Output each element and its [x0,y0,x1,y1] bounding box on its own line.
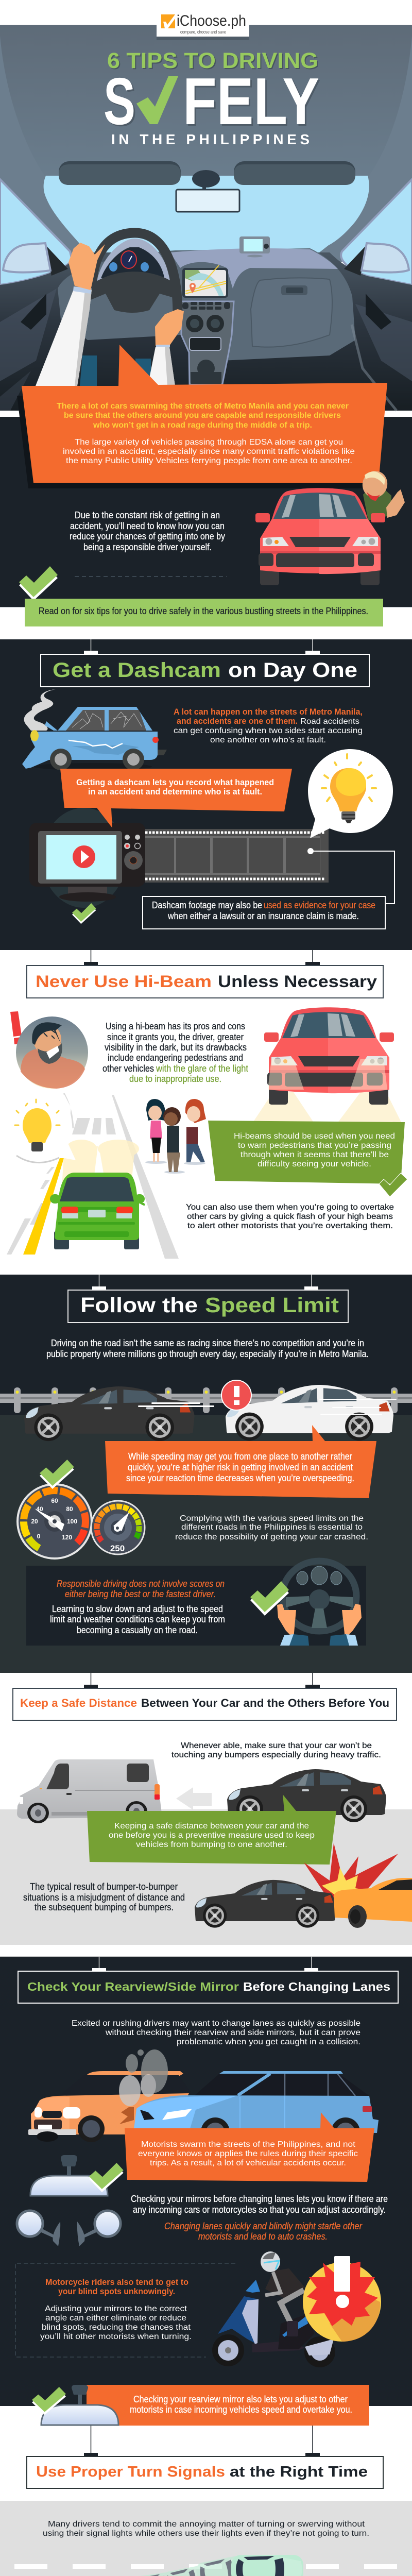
text: accidents: one another on who’s at fault. [210,736,326,744]
driver right arm [148,309,184,386]
heading: speed limit [68,1275,348,1323]
interior base [0,252,412,411]
side mirror right [344,243,409,276]
text: blind spots: your blind spots unknowingly. [58,2286,175,2296]
text: signals: using their signal lights while others use their lights even if they’re not going to turn. [43,2529,369,2538]
check icon: mirror [89,2163,124,2192]
text: hi-beam pros and cons: visibility in the dark, but its drawbacks [105,1042,247,1053]
illustration: side mirrors [17,2211,121,2246]
illustration: smoke [24,689,56,731]
illustration: blue car collision [134,2071,379,2146]
chart: large speedometer: 0 [37,1533,41,1540]
section: speed limit background [0,1275,412,1673]
text: checking mirrors: Changing lanes quickly and blindly might startle other [164,2221,363,2231]
illustration: swerving car trail [48,2554,303,2576]
heading: hi-beam: Unless Necessary [218,972,377,991]
text: signals: Many drivers tend to commit the annoying matter of turning or swerving without [48,2520,365,2529]
road dashes [14,2564,397,2576]
side window right [341,179,412,285]
logo: iChoose.ph header: compare, choose and save [180,29,226,35]
check icon: green [379,1173,407,1197]
text: overtake [186,1203,394,1230]
callout: safe distance [87,1794,336,1865]
text: responsible driver [70,510,225,552]
heading: hi-beam [27,950,383,998]
illustration: camera dome [42,808,126,908]
callout: hi-beam green [208,1121,405,1184]
text: accidents: A lot can happen on the streets of Metro Manila, [174,707,363,717]
callout: hi-beam green: to warn pedestrians that you’re passing [238,1141,391,1150]
box: evidence: when either a lawsuit or an insurance claim is made. [167,911,359,921]
text: bumper to bumper [23,1882,185,1912]
text: bumper to bumper: the subsequent bumping of bumpers. [35,1902,174,1912]
heading: turn signals: at the Right Time [230,2464,368,2480]
heading: safe distance: Keep a Safe Distance [20,1697,137,1709]
illustration: crash orange car [334,1878,412,1928]
text: blind spots [40,2277,192,2341]
logo: iChoose.ph header: iChoose.ph [177,12,246,29]
text: speed intro [46,1338,369,1359]
check icon: dashcam [72,903,96,924]
text: hi-beam pros and cons [102,1021,248,1084]
panel: responsible driving [26,1566,366,1646]
text: hi-beam pros and cons: include endangering pedestrians and [108,1053,243,1063]
sun visor right [234,161,355,185]
text: bumper to bumper: The typical result of bumper-to-bumper [30,1882,178,1892]
illustration: green car rear [50,1173,145,1249]
gps unit [239,236,270,258]
text: signals [43,2520,369,2538]
box: evidence [143,896,385,929]
illustration: smoke [119,2049,168,2106]
callout: speeding [105,1425,376,1498]
road [7,1093,179,1259]
title: S [104,64,135,139]
section: dashcam background [0,639,412,950]
title [104,48,321,147]
callout: speeding: since your reaction time decreases when you’re overspeeding. [126,1473,354,1483]
heading: mirrors [18,1956,398,2003]
center console [181,301,234,384]
illustration: man thumbs up [359,468,405,520]
text: speed limits [175,1514,368,1541]
box: evidence: Dashcam footage may also be [152,900,262,910]
illustration: rearview mirror 2 [41,2385,118,2425]
icon: warning [221,1380,251,1410]
icon: motorcycle warning [303,2256,381,2342]
panel: responsible driving: Learning to slow down and adjust to the speed [52,1604,223,1614]
callout: intro orange [22,345,387,483]
box: evidence: used as evidence for your case [264,900,375,910]
chart: large speedometer: 60 [51,1497,58,1504]
illustration: crash black car [195,1880,336,1928]
text: hi-beam pros and cons: since it grants you, the driver, greater [107,1032,244,1042]
callout: hi-beam green: difficulty seeing your vehicle. [258,1160,371,1168]
text: speed limits: reduce the possibility of getting your car crashed. [175,1533,368,1541]
chart: large speedometer: 100 [67,1518,77,1525]
callout: motorists: everyone knows or applies the rules during their specific [138,2149,358,2158]
text: hi-beam pros and cons: due to inappropriate use. [129,1074,221,1084]
callout: motorists: Motorists swarm the streets of the Philippines, and not [141,2140,356,2149]
text: changing lanes [72,2019,360,2046]
dash top [170,248,338,289]
text: bumpers [171,1741,381,1759]
heading: speed limit: Follow the [80,1293,198,1317]
sun visor left lower [59,164,181,185]
callout: intro orange: involved in an accident, especially since many commit traffic violations like [63,447,355,456]
illustration: guard rail [0,1387,412,1415]
illustration: orange car collision [28,2071,191,2142]
title: FELY [183,64,319,139]
callout: speeding: quickly, you’re at higher risk in getting involved in an accident [128,1462,353,1472]
title: S [105,66,137,140]
text: responsible driver: being a responsible driver yourself. [83,542,212,552]
title: 6 TIPS TO DRIVING [108,49,319,74]
text: hi-beam pros and cons: other vehicles [102,1063,154,1074]
illustration: pedestrians [145,1099,206,1174]
text: speed limits: Complying with the various speed limits on the [180,1514,364,1523]
heading: hi-beam: Never Use Hi-Beam [36,972,212,991]
text: accidents: and accidents are one of them. [177,716,298,726]
door rays [0,289,412,411]
callout: intro orange: the many Public Utility Vehicles ferrying people from one area to another. [66,456,352,465]
check icon: intro [19,566,58,601]
illustration: red car [255,488,385,585]
callout: rearview bottom: Checking your rearview mirror also lets you adjust to other [133,2394,348,2404]
illustration: black car behind van [227,1769,386,1822]
text: checking mirrors: motorists and lead to auto crashes. [198,2231,328,2242]
callout: intro shadow [17,396,381,488]
text: responsible driver: Due to the constant risk of getting in an [75,510,220,520]
illustration: damaged blue car [22,707,167,770]
callout: motorists [125,2112,374,2182]
text: blind spots: you’ll hit other motorists when turning. [40,2332,192,2341]
text: speed limits: different roads in the Philippines is essential to [181,1523,363,1532]
dash [58,248,355,361]
rearview mirror [176,170,239,212]
text: overtake: other cars by giving a quick flash of your high beams [187,1212,393,1221]
illustration: steering wheel hands [277,1561,362,1646]
callout: motorists: trips. As a result, a lot of vehicular accidents occur. [150,2159,346,2167]
text: speed intro: public property where millions go through every day, especially if you’re in Metro Manila. [46,1349,369,1359]
text: blind spots: Adjusting your mirrors to the correct [45,2304,187,2313]
icon: bulb left [15,1095,76,1163]
text: overtake: You can also use them when you’re going to overtake [186,1203,394,1212]
illustration: white speeding car [226,1385,397,1440]
heading: speed limit: Speed Limit [205,1293,339,1317]
heading: dashcam [41,639,369,687]
side window left [0,179,72,285]
callout: intro orange: There a lot of cars swarming the streets of Metro Manila and you can never [57,402,349,411]
callout: speeding: While speeding may get you from one place to another rather [128,1451,352,1462]
text: overtake: to alert other motorists that you’re overtaking them. [187,1222,393,1230]
heading: mirrors: Check Your Rearview/Side Mirror [27,1980,239,1993]
illustration: red car hi-beam [264,1007,394,1105]
panel: responsible driving: becoming a casualty on the road. [77,1625,198,1635]
text: speed intro: Driving on the road isn’t the same as racing since there’s no competition and you’re in [51,1338,364,1348]
heading: safe distance [13,1673,397,1720]
heading: safe distance: Between Your Car and the Others Before You [141,1697,389,1709]
chart: small speedometer [88,1498,148,1557]
callout: intro orange: be sure that the others around you are capable and responsible drivers [64,411,341,420]
title: IN THE PHILIPPINES [111,131,310,147]
check icon: mirror 2 [32,2387,66,2415]
chart: small speedometer: 250 [110,1544,125,1553]
section: mirrors background [0,1956,412,2406]
section: grey road signals [0,2501,412,2576]
chart: large speedometer: 20 [31,1518,38,1525]
banner: read on [0,599,412,639]
heading: dashcam: on Day One [228,659,357,682]
callout: hi-beam green: Hi-beams should be used when you need [234,1132,395,1141]
text: blind spots: Motorcycle riders also tend to get to [45,2277,188,2287]
callout: rearview bottom [87,2385,369,2426]
check icon: speed [40,1460,74,1489]
text: bumpers: Whenever able, make sure that your car won’t be [181,1741,372,1750]
callout: hi-beam green: through when it seems that there’ll be [241,1150,389,1159]
illustration: grey van [17,1759,162,1823]
steering wheel [91,233,178,315]
callout: safe distance: vehicles from bumping to one another. [136,1840,287,1849]
illustration: dashcam [29,823,145,902]
banner: read on: Read on for six tips for you to drive safely in the various bustling streets in the Philippines. [39,606,368,616]
icon: light bulb bubble [308,749,393,838]
connector line [308,849,394,904]
driver left arm [36,243,105,386]
instrument cluster [97,239,171,284]
text: responsible driver: accident, you’ll need to know how you can [70,521,225,531]
callout: safe distance: one before you is a preventive measure used to keep [109,1831,315,1840]
text: bumper to bumper: situations is a misjudgment of distance and [23,1892,185,1903]
illustration: dazzled man [10,1011,88,1089]
callout: orange dashcam: in an accident and determine who is at fault. [88,787,262,796]
section: intro dark background [0,417,412,607]
heading: mirrors: Before Changing Lanes [243,1980,390,1993]
text: changing lanes: problematic when you get caught in a collision. [177,2038,360,2046]
icon: explosion [304,1843,398,1901]
text: changing lanes: Excited or rushing drivers may want to change lanes as quickly as possible [72,2019,360,2028]
text: checking mirrors: any incoming cars or motorcycles so that you can adjust accordingly. [133,2205,386,2215]
text: blind spots: blind spots, reducing the chances that [42,2323,191,2332]
illustration: film strip [145,829,329,883]
chart: large speedometer: 120 [62,1534,72,1541]
illustration: motorcycle rider [212,2251,335,2367]
chart: large speedometer: 40 [36,1505,43,1513]
navigation screen [182,265,228,298]
windshield [44,176,369,252]
sun visor left [59,161,181,185]
text: checking mirrors [131,2194,388,2242]
heading: dashcam: Get a Dashcam [53,659,221,682]
heading: turn signals: Use Proper Turn Signals [36,2464,225,2480]
radio buttons [182,302,230,310]
text: changing lanes: without checking their rearview and side mirrors, but it can prove [105,2028,360,2037]
section: grey road [0,1809,412,1945]
callout: safe distance: Keeping a safe distance between your car and the [114,1822,309,1831]
callout: orange dashcam: Getting a dashcam lets you record what happened [76,777,274,787]
title: 6 TIPS TO DRIVING [107,48,318,73]
heading: turn signals [27,2426,383,2488]
section: header and car interior [0,0,412,417]
callout: rearview bottom: motorists in case incoming vehicles speed and overtake you. [130,2404,352,2415]
illustration: black speeding car [24,1386,214,1441]
text: accidents: Road accidents [300,717,359,726]
panel: responsible driving: Responsible driving does not involve scores on [57,1579,225,1589]
illustration: rearview mirror [30,2155,108,2196]
arrow: keep distance [176,1787,212,1810]
text: blind spots: angle can either eliminate or reduce [45,2314,186,2323]
panel: responsible driving: limit and weather conditions can keep you from [50,1614,225,1624]
callout: intro orange: who won’t get in a road rage during the middle of a trip. [93,421,312,430]
title: FELY [184,66,321,140]
vents [21,294,391,330]
floor and pants [80,355,151,386]
text: hi-beam pros and cons: Using a hi-beam has its pros and cons [106,1021,245,1031]
illustration: headlight beams [252,1092,402,1123]
logo: iChoose.ph header [157,0,249,40]
text: accidents [174,707,363,744]
text: hi-beam pros and cons: with the glare of the light [156,1063,248,1074]
glove box [251,278,332,347]
callout: intro orange: The large variety of vehicles passing through EDSA alone can get you [75,438,343,447]
panel: responsible driving: either being the best or the fastest driver. [65,1589,216,1599]
chart: large speedometer [11,1478,98,1565]
text: responsible driver: reduce your chances of getting into one by [70,531,225,541]
callout: orange dashcam [60,769,292,828]
text: accidents: can get confusing when two sides start accusing [174,726,363,735]
chart: large speedometer: 80 [66,1505,73,1513]
side mirror left [3,243,68,276]
text: bumpers: touching any bumpers especially during heavy traffic. [171,1751,381,1759]
check icon: steering [250,1581,289,1616]
